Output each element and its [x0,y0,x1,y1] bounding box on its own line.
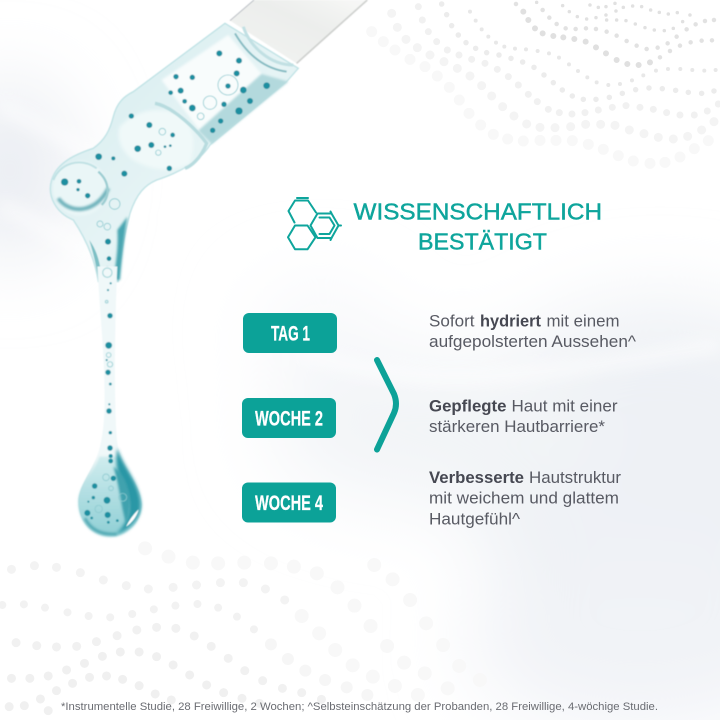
bubbles [95,268,127,513]
text: week 2 benefit: Gepflegte [429,398,506,416]
background: bottom-left dot pattern [2,548,480,711]
text: week 2 benefit: stärkeren Hautbarriere* [429,418,606,436]
glass tube [230,0,367,63]
text: week 2 benefit: Haut mit einer [512,398,618,416]
text: week 4 benefit: Hautstruktur [529,469,622,487]
arrow: chevron [377,360,396,450]
text: week 4 benefit: Verbesserte [429,469,524,487]
title [354,198,602,254]
title: BESTÄTIGT [418,228,547,254]
dots [61,50,270,261]
badge: Tag 1: TAG 1 [271,322,310,346]
badge: Woche 4 [242,482,336,522]
strand shadow [113,217,127,280]
badge: Woche 4: WOCHE 4 [255,492,323,515]
title: WISSENSCHAFTLICH [354,198,602,224]
text: week 2 benefit [429,398,618,436]
dropper body silhouette [50,23,298,282]
stream and droplet [78,267,142,537]
text: week 4 benefit [429,469,622,528]
dropper pipette [50,0,367,537]
text: week 4 benefit: Hautgefühl^ [429,510,520,528]
droplet shadow [115,448,141,535]
inner tube highlight [162,35,262,131]
text: day 1 benefit [429,312,636,351]
dots [84,282,119,524]
text: day 1 benefit: aufgepolsterten Aussehen^ [429,333,636,351]
ball [53,161,107,216]
text: day 1 benefit: mit einem [546,312,620,330]
bubbles [97,75,238,277]
badge: Tag 1 [243,313,337,353]
rim of lip [235,33,287,72]
droplet body tint [78,457,142,537]
footnote: *Instrumentelle Studie, 28 Freiwillige, 2 Wochen; ^Selbsteinschätzung der Probanden, 28 Freiwillige, 4-wöchige Studie. [61,701,658,713]
text: day 1 benefit: Sofort [429,312,475,330]
icon: molecule hexagons [288,198,341,249]
background: top-right dot pattern [372,2,718,163]
text: day 1 benefit: hydriert [480,312,541,330]
badge: Woche 2: WOCHE 2 [255,408,323,430]
text: week 4 benefit: mit weichem und glattem [429,490,619,508]
badge: Woche 2 [242,398,336,438]
neck collar [155,103,207,168]
